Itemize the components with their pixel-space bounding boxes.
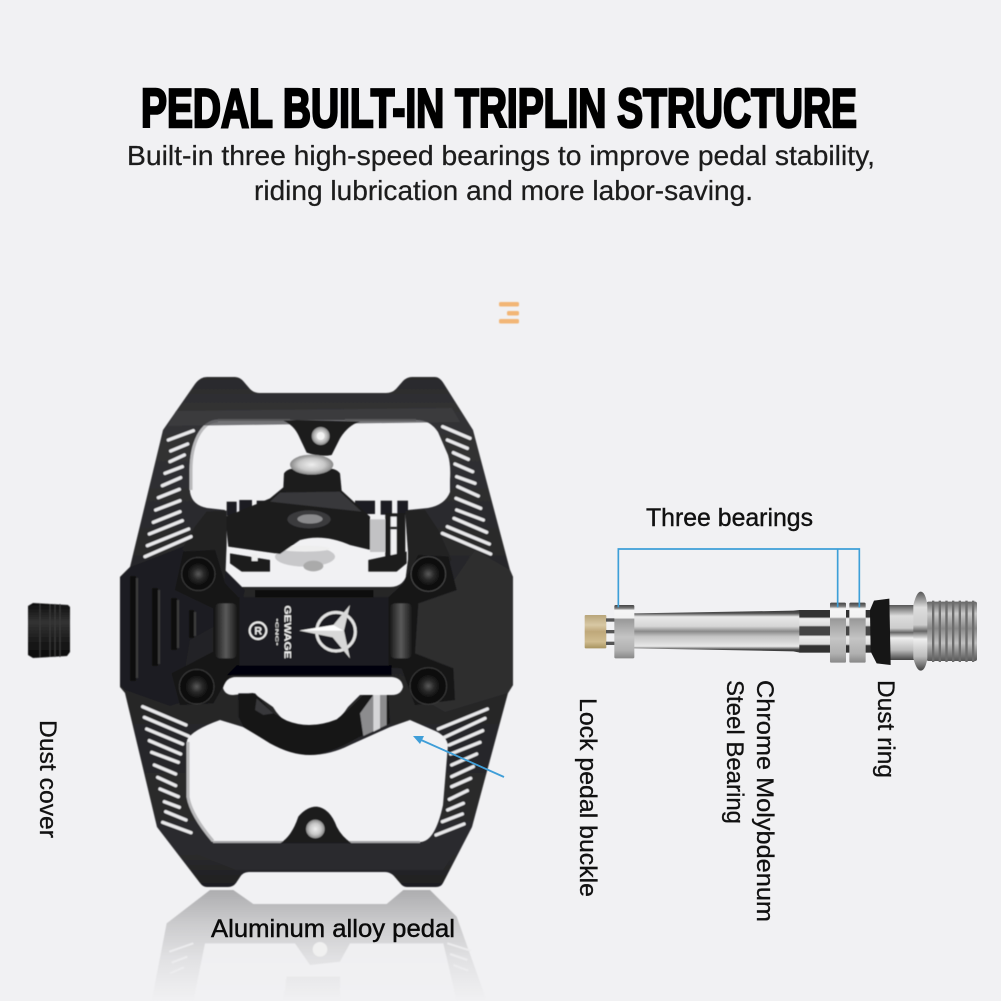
left arm of upper frame	[182, 511, 227, 587]
hole rim highlights	[188, 420, 420, 842]
label: chrome molybdenum steel bearing	[721, 680, 778, 922]
label: dust ring: Dust ring	[872, 680, 899, 778]
spring tips	[227, 500, 408, 516]
bearing 3	[849, 603, 866, 663]
side post	[385, 513, 405, 560]
flange	[913, 592, 927, 671]
pedal frame	[120, 377, 513, 887]
icon: orange menu mark	[499, 302, 519, 324]
stripes: top	[145, 427, 491, 557]
neck	[799, 610, 830, 653]
pedal	[120, 377, 513, 887]
brand sub text: •CNC•	[274, 618, 280, 646]
right pad	[390, 603, 412, 658]
lower silver axle	[275, 546, 335, 571]
dust cover part	[28, 603, 70, 658]
subtitle: Built-in three high-speed bearings to improve pedal stability,	[127, 140, 875, 171]
clip body	[225, 468, 371, 554]
brass nut	[585, 615, 606, 648]
registered mark: R	[254, 626, 262, 638]
axle assembly	[585, 592, 977, 671]
label: aluminum alloy pedal: Aluminum alloy pedal	[211, 915, 455, 943]
registered mark	[250, 622, 266, 639]
screw: bottom right	[410, 668, 447, 704]
buckle top arm highlight	[255, 698, 273, 715]
bearing callout lines	[618, 549, 859, 607]
silver block	[370, 519, 385, 552]
upper bracket	[283, 420, 360, 456]
center plate	[172, 550, 457, 705]
thread	[927, 602, 977, 661]
end links	[606, 618, 615, 645]
lower blocks	[230, 552, 407, 572]
right tread block	[410, 550, 513, 712]
stripes: bottom	[143, 707, 487, 835]
left tread block	[120, 544, 245, 706]
bottom bracket	[280, 807, 352, 843]
right arm of upper frame	[405, 510, 452, 587]
black seal	[870, 599, 891, 665]
collar	[888, 605, 915, 660]
screw: bottom left	[179, 669, 214, 704]
label: dust cover: Dust cover	[34, 720, 61, 838]
label: chrome molybdenum steel bearing: Steel Bearing	[721, 680, 748, 824]
arrow: lock pedal buckle	[413, 736, 504, 777]
clip center oval	[287, 510, 331, 528]
label: lock pedal buckle: Lock pedal buckle	[574, 698, 601, 897]
subtitle: riding lubrication and more labor-saving.	[254, 175, 753, 206]
bottom edge bevel	[176, 846, 459, 870]
top edge bevel	[168, 408, 460, 426]
clip and center plate	[182, 420, 452, 587]
silver bolt	[290, 455, 333, 475]
plate surface	[239, 597, 389, 666]
label: chrome molybdenum steel bearing: Chrome Molybdenum	[751, 680, 778, 922]
lock pedal buckle	[238, 693, 390, 755]
shaft	[633, 610, 800, 653]
bearing 2	[830, 603, 846, 663]
brand text: GEWAGE	[283, 605, 293, 659]
screw: top left	[182, 557, 215, 591]
left pad	[215, 603, 237, 658]
pedal reflection	[152, 890, 487, 1001]
bearing 1	[614, 605, 634, 658]
subtitle	[127, 140, 875, 206]
label: three bearings: Three bearings	[646, 504, 813, 532]
screw: top right	[411, 557, 446, 591]
logo mark	[299, 605, 355, 658]
